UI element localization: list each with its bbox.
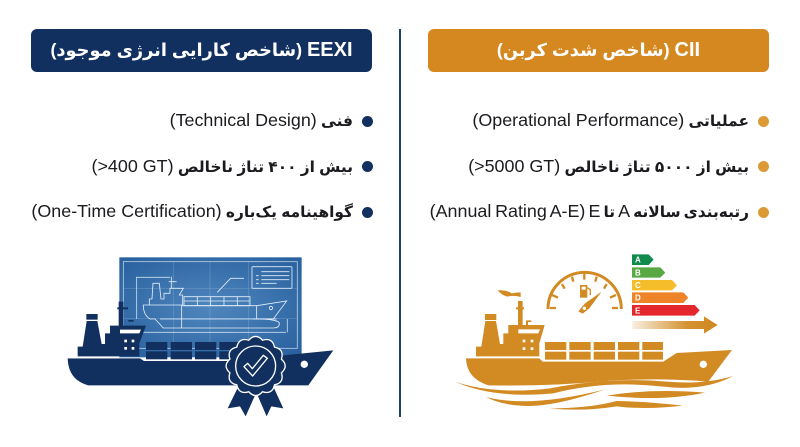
energy rating bars A-E: E [635, 306, 641, 315]
text: CII 1: عملیاتی (Operational Performance) [472, 110, 749, 130]
text: EEXI 3: گواهینامه یک‌باره (One-Time Certification) [31, 201, 353, 221]
orange ship [455, 290, 733, 410]
gradient arrow [632, 316, 718, 334]
heading: CII: CII (شاخص شدت کربن) [497, 39, 700, 61]
energy rating bars A-E: D [635, 294, 641, 303]
bullet: EEXI 2 [362, 161, 373, 172]
text: CII 3: رتبه‌بندی سالانه A تا E (Annual Rating A-E) [430, 201, 749, 221]
energy rating bars A-E [632, 254, 700, 316]
certification ribbon badge [226, 336, 285, 416]
heading: CII [428, 29, 769, 72]
energy rating bars A-E: A [635, 256, 641, 265]
text: EEXI 1: فنی (Technical Design) [170, 110, 353, 130]
ship details [68, 330, 308, 368]
heading: EEXI [31, 29, 372, 72]
bullet: CII 1 [758, 116, 769, 127]
bullet: CII 3 [758, 207, 769, 218]
bullet: EEXI 1 [362, 116, 373, 127]
text: CII 2: بیش از ۵۰۰۰ تناژ ناخالص (>5000 GT) [468, 156, 749, 176]
blueprint sheet [119, 257, 302, 357]
divider line [399, 29, 401, 417]
energy rating bars A-E: C [635, 281, 641, 290]
illustration: blueprint ship with certification [68, 257, 333, 416]
bullet: CII 2 [758, 161, 769, 172]
energy rating bars A-E: B [635, 268, 641, 277]
navy ship [68, 302, 333, 385]
ship details [518, 329, 707, 368]
bullet: EEXI 3 [362, 207, 373, 218]
text: EEXI 2: بیش از ۴۰۰ تناژ ناخالص (>400 GT) [92, 156, 353, 176]
heading: EEXI: EEXI (شاخص کارایی انرژی موجود) [50, 39, 353, 61]
fuel gauge [548, 272, 621, 314]
illustration: carbon-rated ship [455, 254, 733, 410]
